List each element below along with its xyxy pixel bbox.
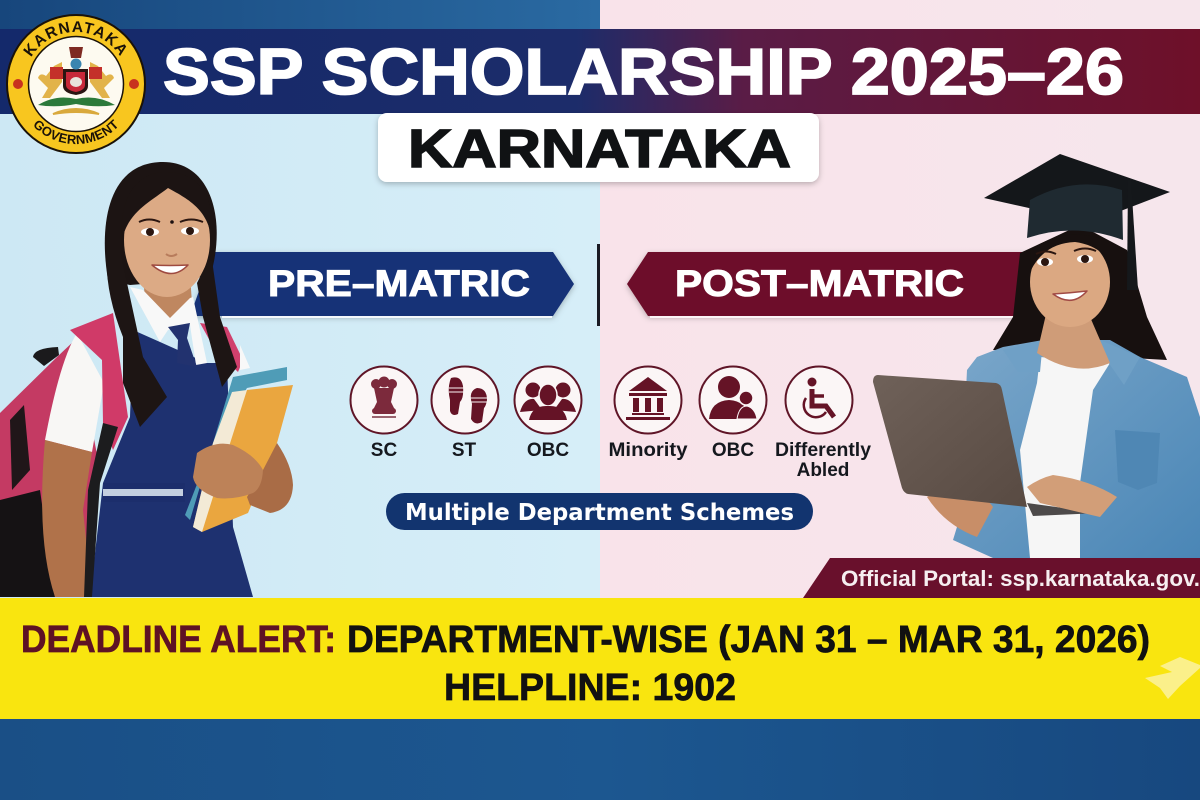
face (1030, 237, 1110, 327)
black strap (84, 423, 118, 597)
pink strap (70, 313, 128, 450)
hairline (122, 172, 212, 240)
eyes and bindi (141, 228, 159, 236)
cap dome (1027, 184, 1123, 240)
lower hand (927, 483, 993, 537)
hand (193, 444, 263, 498)
deadline text: DEADLINE ALERT: (21, 619, 336, 661)
multiple department schemes pill: Multiple Department Schemes (405, 500, 794, 526)
sleeve left (45, 333, 104, 452)
laptop (873, 375, 1027, 507)
bottom blue band (0, 719, 1200, 800)
neck (1037, 310, 1110, 369)
post-matric ribbon (627, 252, 1030, 318)
category label: OBC: OBC (527, 440, 569, 461)
category icon: OBC persons (700, 366, 766, 434)
title band (0, 29, 1200, 114)
right pink strap (200, 323, 243, 372)
neck (143, 275, 192, 322)
jacket (953, 340, 1200, 558)
cap board (984, 154, 1170, 222)
category icon: OBC group (514, 366, 582, 434)
official portal banner (803, 558, 1200, 598)
multiple department schemes pill (386, 493, 813, 530)
divider line (597, 244, 600, 326)
typing hand (1027, 475, 1117, 517)
emblem: Karnataka Government seal: GOVERNMENT (34, 119, 118, 144)
eyes (1037, 258, 1053, 266)
collar (130, 287, 207, 365)
smile (152, 265, 188, 274)
karnataka subtitle pill: KARNATAKA (408, 119, 791, 179)
right braid (197, 260, 237, 387)
graduate student illustration (873, 154, 1200, 558)
left arm (42, 440, 92, 597)
title text: SSP SCHOLARSHIP 2025–26 (163, 35, 1124, 108)
category icon: wheelchair (786, 366, 852, 434)
category label: OBC: OBC (712, 440, 754, 461)
category label: Minority: Minority (608, 440, 688, 461)
official portal banner: Official Portal: ssp.karnataka.gov. (841, 566, 1200, 591)
post-matric ribbon: POST–MATRIC (675, 263, 964, 304)
category label: SC: SC (371, 440, 397, 461)
hair over forehead (1030, 235, 1116, 270)
background: blue left and pink right (0, 0, 1200, 600)
emblem: Karnataka Government seal: KARNATAKA (23, 21, 126, 56)
category label: ST: ST (452, 440, 477, 461)
left braid (107, 250, 167, 427)
pre-matric ribbon: PRE–MATRIC (268, 263, 530, 304)
face (124, 183, 210, 297)
dress (90, 330, 253, 597)
emblem: Karnataka Government seal (6, 14, 146, 154)
category label: Differently Abled: Abled (797, 460, 849, 481)
collars (1003, 340, 1043, 372)
blue book (185, 367, 287, 520)
category icon: SC (350, 366, 418, 434)
category icon: ST footprints (432, 366, 498, 434)
deadline text: DEPARTMENT-WISE (JAN 31 – MAR 31, 2026) (347, 619, 1150, 661)
smile (1053, 291, 1087, 300)
girl student illustration (0, 162, 293, 597)
deadline banner (0, 598, 1200, 719)
belt (103, 483, 185, 502)
right arm (247, 443, 293, 513)
hair (993, 225, 1167, 360)
backpack handle (33, 347, 59, 366)
tassel (1127, 180, 1138, 290)
orange book (193, 385, 293, 532)
category icon: Minority building (614, 366, 682, 434)
pre-matric ribbon (190, 252, 574, 318)
pocket (1115, 430, 1160, 490)
backpack (0, 340, 100, 597)
white top (1020, 357, 1110, 558)
helpline text: HELPLINE: 1902 (444, 667, 736, 709)
hair back (105, 162, 217, 285)
karnataka subtitle pill (378, 113, 819, 182)
sparkle mark (1145, 657, 1200, 699)
tie (168, 323, 197, 367)
category label: Differently Abled: Differently (775, 440, 871, 461)
